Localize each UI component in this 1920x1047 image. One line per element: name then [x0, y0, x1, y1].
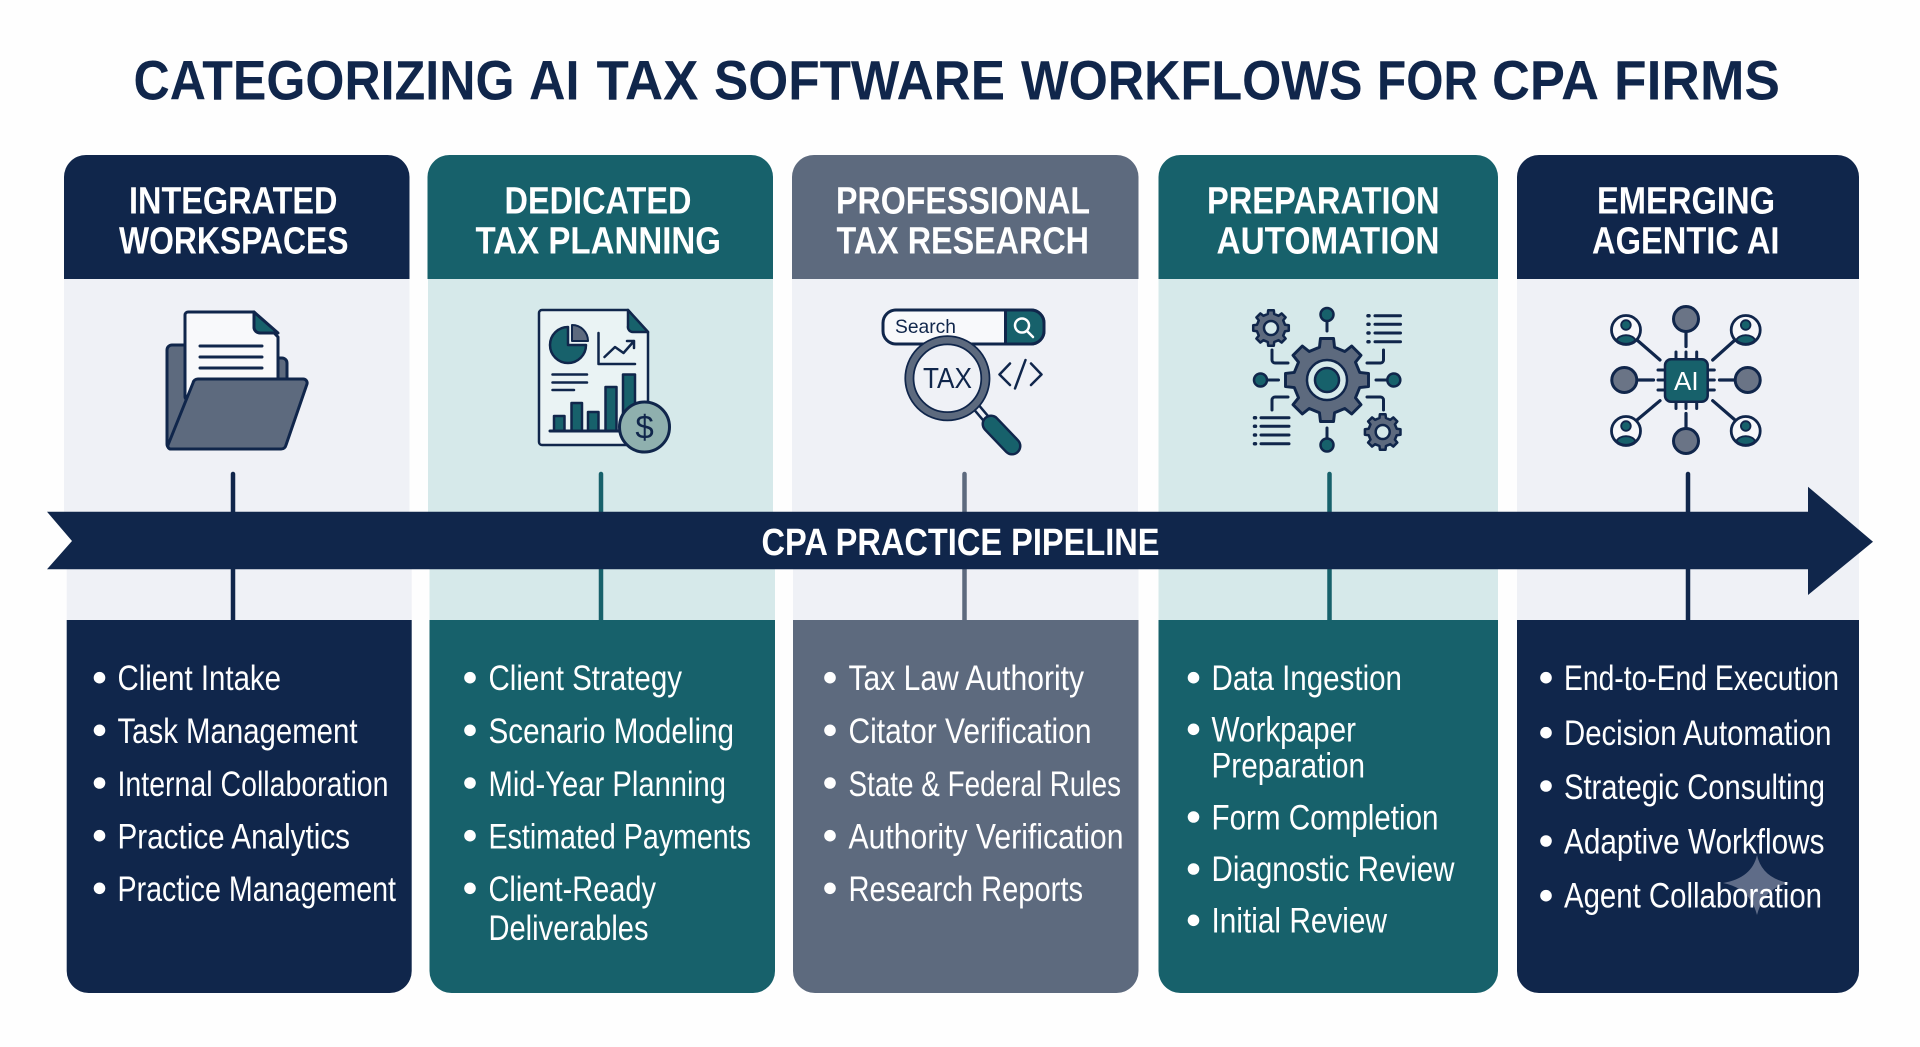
- light band: professional tax research: [792, 279, 1138, 620]
- body: emerging agentic ai list: Strategic Consulting: [1564, 768, 1825, 807]
- light band: preparation automation: [1158, 279, 1498, 620]
- header: emerging agentic ai: EMERGING: [1597, 180, 1775, 222]
- icon label: tax: TAX: [923, 363, 972, 395]
- panel: preparation automation: [1158, 155, 1498, 993]
- header: dedicated tax planning: DEDICATED: [504, 180, 692, 222]
- body: professional tax research list: [793, 620, 1138, 993]
- light band: integrated workspaces: [64, 279, 412, 620]
- connector: dedicated tax planning: [599, 474, 603, 620]
- header: professional tax research: PROFESSIONAL: [836, 180, 1090, 222]
- title: [134, 48, 1780, 112]
- body: emerging agentic ai list: Decision Automation: [1564, 714, 1832, 753]
- body: professional tax research list: Citator Verification: [848, 712, 1092, 751]
- header: professional tax research: [792, 155, 1138, 279]
- icon label: search: Search: [895, 316, 956, 338]
- body: preparation automation list: Diagnostic Review: [1212, 850, 1455, 889]
- body: professional tax research list: State & Federal Rules: [848, 765, 1121, 804]
- header: integrated workspaces: [64, 155, 410, 279]
- body: integrated workspaces list: Practice Management: [118, 870, 396, 909]
- body: preparation automation list: Preparation: [1212, 747, 1365, 786]
- body: emerging agentic ai list: End-to-End Execution: [1564, 659, 1839, 698]
- body: dedicated tax planning list: Mid-Year Planning: [488, 765, 726, 804]
- panel: emerging agentic ai: [1517, 155, 1859, 993]
- body: dedicated tax planning list: Client-Ready: [488, 870, 656, 909]
- icon label: dollar sign: $: [635, 408, 654, 446]
- decorative sparkle: [1723, 855, 1789, 915]
- body: integrated workspaces list: [67, 620, 412, 993]
- icon: gears and process nodes: [1253, 308, 1400, 452]
- panel: professional tax research: [792, 155, 1138, 993]
- light band: emerging agentic ai: [1517, 279, 1859, 620]
- title: TAX: [596, 48, 698, 112]
- connector: integrated workspaces: [231, 474, 235, 620]
- body: preparation automation list: Data Ingestion: [1212, 659, 1402, 698]
- header: preparation automation: [1158, 155, 1498, 279]
- body: professional tax research list: Authority Verification: [848, 818, 1124, 856]
- panel: dedicated tax planning: [428, 155, 775, 993]
- icon: search bar and magnifier: [883, 310, 1044, 446]
- title: WORKFLOWS: [1021, 48, 1362, 112]
- title: FOR: [1377, 48, 1478, 112]
- title: SOFTWARE: [714, 48, 1005, 112]
- header: professional tax research: TAX RESEARCH: [836, 220, 1089, 262]
- body: preparation automation list: Form Completion: [1212, 798, 1438, 837]
- icon: folder with document: [167, 312, 307, 449]
- header: dedicated tax planning: [428, 155, 773, 279]
- header: preparation automation: AUTOMATION: [1216, 220, 1440, 262]
- arrow: cpa practice pipeline: [47, 487, 1873, 595]
- body: emerging agentic ai list: Adaptive Workflows: [1564, 822, 1824, 861]
- body: dedicated tax planning list: [430, 620, 775, 993]
- body: dedicated tax planning list: Deliverables: [488, 909, 648, 948]
- title: CPA: [1492, 48, 1599, 112]
- header: integrated workspaces: INTEGRATED: [129, 180, 338, 222]
- header: dedicated tax planning: TAX PLANNING: [476, 220, 721, 262]
- body: preparation automation list: [1158, 620, 1498, 993]
- body: preparation automation list: Workpaper: [1212, 711, 1356, 750]
- header: integrated workspaces: WORKSPACES: [119, 220, 348, 262]
- icon: ai chip network: [1612, 306, 1760, 454]
- icon: report with charts and dollar coin: [539, 310, 670, 452]
- body: dedicated tax planning list: Estimated Payments: [488, 818, 751, 856]
- body: integrated workspaces list: Task Management: [118, 712, 358, 751]
- body: professional tax research list: Research Reports: [848, 870, 1083, 909]
- title: CATEGORIZING: [134, 48, 514, 112]
- light band: dedicated tax planning: [428, 279, 775, 620]
- body: dedicated tax planning list: Client Strategy: [488, 659, 682, 698]
- body: integrated workspaces list: Internal Collaboration: [118, 765, 388, 804]
- body: emerging agentic ai list: Agent Collaboration: [1564, 877, 1822, 916]
- header: emerging agentic ai: [1517, 155, 1859, 279]
- title: AI: [529, 48, 580, 112]
- body: integrated workspaces list: Client Intake: [118, 659, 281, 698]
- connector: preparation automation: [1327, 474, 1332, 620]
- header: preparation automation: PREPARATION: [1207, 180, 1440, 222]
- arrow: cpa practice pipeline: CPA PRACTICE PIPELINE: [762, 522, 1160, 564]
- title: FIRMS: [1614, 48, 1780, 112]
- connector: professional tax research: [962, 474, 967, 620]
- body: dedicated tax planning list: Scenario Modeling: [488, 712, 734, 751]
- body: professional tax research list: Tax Law Authority: [848, 659, 1084, 698]
- panel: integrated workspaces: [64, 155, 412, 993]
- body: integrated workspaces list: Practice Analytics: [118, 818, 350, 856]
- body: emerging agentic ai list: [1517, 620, 1859, 993]
- icon label: ai: AI: [1674, 366, 1699, 396]
- connector: emerging agentic ai: [1686, 474, 1690, 620]
- header: emerging agentic ai: AGENTIC AI: [1592, 220, 1780, 262]
- body: preparation automation list: Initial Review: [1212, 902, 1388, 941]
